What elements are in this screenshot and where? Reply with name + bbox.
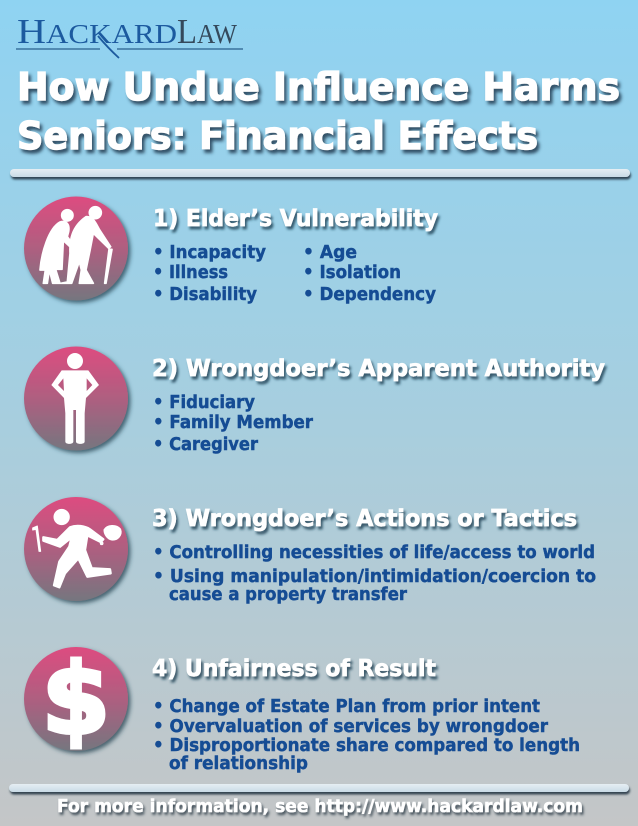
bullets: • Controlling necessities of life/access to world: [153, 543, 595, 563]
bullets: • Family Member: [153, 413, 313, 433]
bullets: • Caregiver: [153, 435, 258, 455]
section 3: wrongdoer's actions or tactics: [24, 497, 596, 605]
bullets: • Isolation: [303, 263, 401, 283]
bullets: of relationship: [169, 754, 308, 774]
bullets: cause a property transfer: [169, 585, 407, 605]
bullets: • Disability: [153, 285, 258, 305]
heading: 1) Elder’s Vulnerability: [153, 206, 438, 232]
top divider: [10, 169, 630, 177]
logo: Hackard Law: LAW: [177, 12, 237, 51]
icon: dollar sign: $: [42, 643, 110, 757]
heading: 2) Wrongdoer’s Apparent Authority: [152, 356, 605, 382]
bullets: • Age: [303, 243, 357, 263]
logo: Hackard Law: HACKARD: [17, 12, 177, 51]
icon: standing person: [24, 346, 128, 450]
bullets: [153, 697, 580, 774]
bullets: • Illness: [153, 263, 228, 283]
section 4: unfairness of result: [24, 643, 580, 774]
title: Seniors: Financial Effects: [17, 114, 538, 158]
bullets: • Dependency: [303, 285, 437, 305]
footer link text: For more information, see http://www.hackardlaw.com: [57, 796, 583, 817]
bottom divider: [9, 784, 629, 792]
bullets: • Using manipulation/intimidation/coercion to: [153, 567, 596, 587]
bullets: [153, 543, 596, 605]
title: [17, 65, 620, 158]
bullets: • Incapacity: [153, 243, 267, 263]
bullets: [153, 393, 313, 455]
section 2: wrongdoer's apparent authority: [24, 346, 605, 455]
title: How Undue Influence Harms: [17, 65, 620, 109]
icon: elderly couple: [24, 196, 128, 300]
icon: dollar sign: [24, 643, 128, 757]
logo: Hackard Law: [16, 12, 243, 58]
heading: 4) Unfairness of Result: [152, 656, 436, 682]
section 1: elder's vulnerability: [24, 196, 438, 305]
icon: running thief: [24, 497, 128, 601]
bullets: [153, 243, 437, 305]
bullets: • Disproportionate share compared to length: [153, 736, 580, 756]
bullets: • Change of Estate Plan from prior intent: [153, 697, 540, 717]
bullets: • Overvaluation of services by wrongdoer: [153, 717, 548, 737]
bullets: • Fiduciary: [153, 393, 256, 413]
heading: 3) Wrongdoer’s Actions or Tactics: [152, 506, 577, 532]
